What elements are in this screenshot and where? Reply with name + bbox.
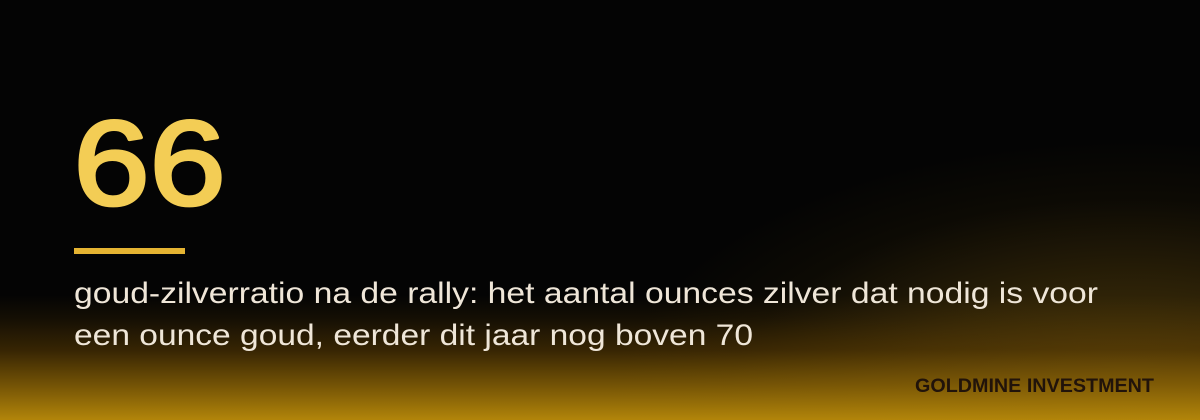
headline number: 66 <box>74 97 226 231</box>
accent rule <box>74 248 185 254</box>
description text: een ounce goud, eerder dit jaar nog boven 70 <box>74 319 753 352</box>
description text: goud-zilverratio na de rally: het aantal ounces zilver dat nodig is voor <box>74 277 1098 310</box>
description text <box>74 277 1098 352</box>
source label: GOLDMINE INVESTMENT <box>915 376 1154 397</box>
